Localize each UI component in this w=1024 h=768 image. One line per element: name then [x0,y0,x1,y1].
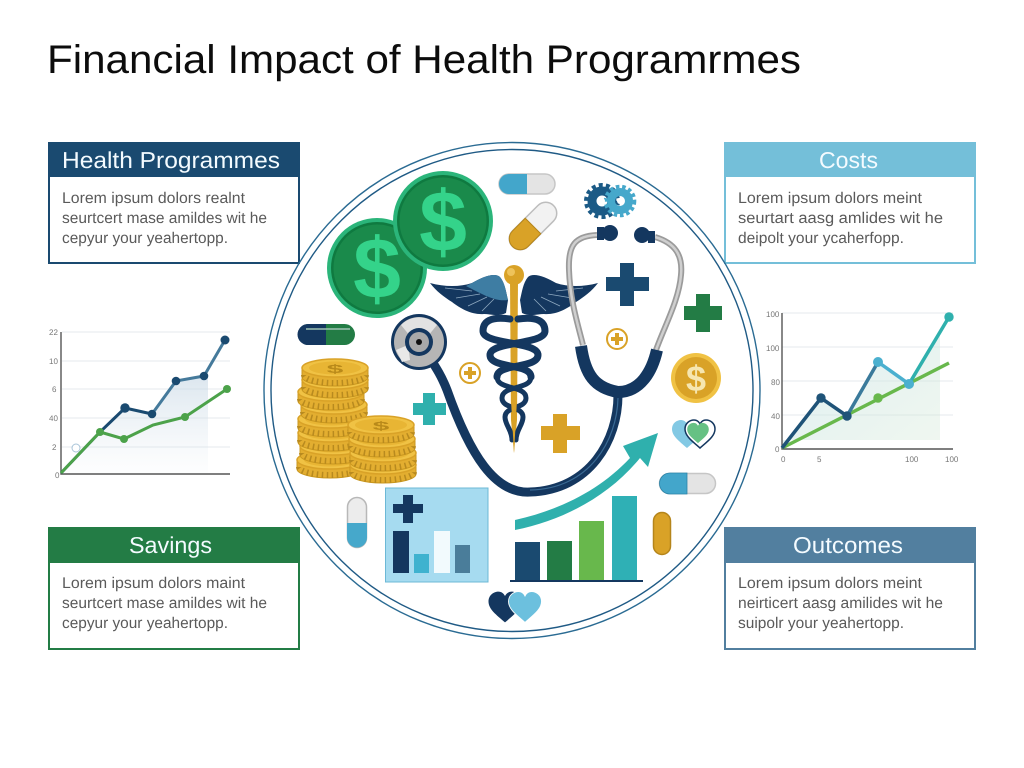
bar chart with rising arrow [510,433,658,581]
line chart: left [49,328,231,480]
icon: gold capsule [654,512,670,554]
icon: caduceus [430,265,598,453]
panel: savings: Savings [129,532,212,558]
icon: stethoscope [391,225,681,492]
line chart: right [766,310,959,464]
icon: blue card with bar chart and cross [386,488,488,582]
panel: health programmes: cepyur your yeahertopp. [62,230,228,247]
panel: savings: Lorem ipsum dolors maint [62,575,246,592]
panel: outcomes: suipolr your yeahertopp. [738,615,904,632]
central circle rings [264,142,760,638]
line chart: left: 6 [52,385,57,394]
icon: gold and white tilted pill [505,198,561,254]
line chart: right: 100 [766,310,780,319]
icon: hearts upper right [672,420,715,448]
panel: costs [724,142,976,263]
icon: coin stacks: $ [373,420,389,433]
line chart: left: 40 [49,414,58,423]
panel: outcomes: neirticert aasg amilides wit he [738,595,943,612]
line chart: left: 0 [55,471,60,480]
panel: savings: cepyur your yeahertopp. [62,615,228,632]
icon: blue and white pill [499,174,555,194]
line chart: right: 100 [905,455,919,464]
icon: teal cross [413,393,446,425]
panel: health programmes: seurtcert mase amildes wit he [62,210,267,227]
line chart: left: 22 [49,328,58,337]
icon: gold circled plus right [607,329,627,349]
icon: green cross [684,294,722,332]
icon: navy and green pill [298,324,355,345]
line chart: left: 10 [49,357,58,366]
title: Financial Impact of Health Programrmes [47,38,801,82]
icon: green dollar coins [327,171,493,318]
icon: green dollar coins: $ [419,174,467,270]
line chart: right: 5 [817,455,822,464]
line chart: right: 0 [775,445,780,454]
icon: coin stacks [297,359,416,483]
icon: gears [586,185,634,217]
line chart: right: 80 [771,378,780,387]
line chart: right: 0 [781,455,786,464]
panel: costs: deipolt your ycaherfopp. [738,230,904,247]
icon: coin stacks: $ [327,363,343,376]
line chart: right: 40 [771,412,780,421]
panel: savings [48,527,300,649]
panel: outcomes [724,527,976,649]
panel: health programmes [48,142,300,263]
line chart: right: 100 [945,455,959,464]
icon: navy cross [606,263,649,306]
panel: health programmes: Health Programmes [62,147,280,173]
panel: savings: seurtcert mase amildes wit he [62,595,267,612]
panel: costs: Costs [819,147,878,173]
icon: blue and grey pill [660,473,716,494]
panel: outcomes: Outcomes [793,532,903,558]
icon: gold cross [541,414,580,453]
panel: outcomes: Lorem ipsum dolors meint [738,575,923,592]
icon: vertical blue capsule [347,498,367,548]
line chart: left: 2 [52,443,57,452]
icon: gold circled plus left [460,363,480,383]
icon: hearts bottom [488,592,542,622]
icon: gold dollar coin: $ [686,358,706,399]
panel: costs: Lorem ipsum dolors meint [738,190,923,207]
icon: gold dollar coin [671,353,721,403]
icon: green dollar coins: $ [353,221,401,317]
panel: health programmes: Lorem ipsum dolors realnt [62,190,246,207]
line chart: right: 100 [766,344,780,353]
panel: costs: seurtart aasg amlides wit he [738,210,943,227]
